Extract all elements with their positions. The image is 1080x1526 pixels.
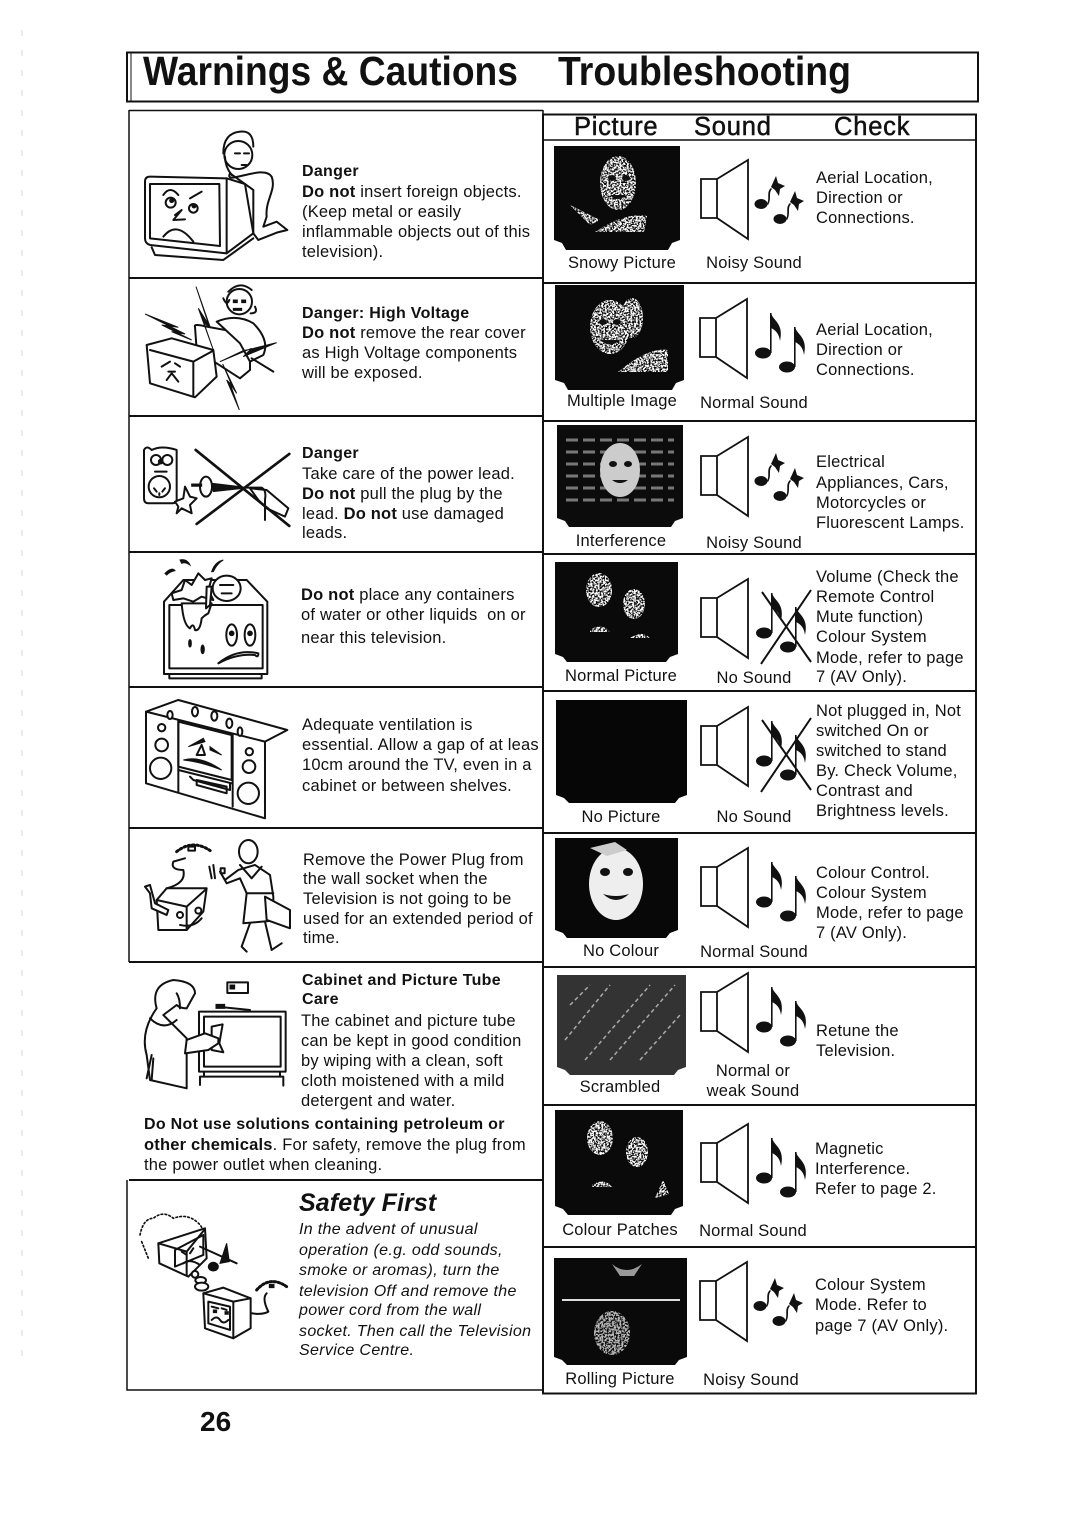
text: foreign objects danger: television). [302,243,383,261]
text: ventilation: Adequate ventilation is [302,716,473,734]
icon: high voltage shock [145,285,277,410]
text: cabinet and picture tube care [144,972,526,1174]
text: foreign objects danger: Danger [302,163,359,180]
row: rolling picture: page 7 (AV Only). [815,1317,948,1335]
row: snowy picture: Connections. [816,209,915,227]
text: power lead danger: leads. [302,524,347,542]
text: high voltage danger: Do not remove the rear cover [302,324,526,342]
row: snowy picture: Aerial Location, [816,169,933,187]
row: multiple image: Normal Sound [700,394,808,412]
text: high voltage danger: Danger: High Voltage [302,305,470,322]
icon: water spilled on TV [164,560,267,678]
row: interference [557,425,964,552]
row: no colour: Normal Sound [700,943,808,961]
row: normal picture: Mode, refer to page [816,649,964,667]
text: cabinet and picture tube care: Do Not use solutions containing petroleum or [144,1116,505,1133]
row: interference: Noisy Sound [706,534,802,552]
text: power lead danger: Danger [302,445,359,462]
row: scrambled: weak Sound [706,1082,799,1100]
text: remove power plug [303,851,533,947]
row: snowy picture [554,146,933,272]
row: multiple image: Aerial Location, [816,321,933,339]
text: ventilation: essential. Allow a gap of at leas [302,736,539,754]
row: normal picture: 7 (AV Only). [816,668,907,686]
row: normal picture: Normal Picture [565,667,677,685]
row: interference: Fluorescent Lamps. [816,514,964,532]
row: no picture: By. Check Volume, [816,762,958,780]
text: liquids warning: Do not place any containers [301,586,515,604]
text: cabinet and picture tube care: the power outlet when cleaning. [144,1156,382,1174]
row: rolling picture [554,1258,948,1389]
row: normal picture [555,562,964,687]
text: safety first advice [298,1221,531,1359]
text: ventilation [302,716,539,795]
row: no picture [556,700,961,826]
text: liquids warning: of water or other liquids on or [301,606,526,624]
row: no picture: No Picture [581,808,661,826]
icon: woman wiping TV [145,980,286,1088]
picture: interference [557,425,683,527]
picture: no colour [555,838,678,938]
row: snowy picture: Noisy Sound [706,254,802,272]
row: snowy picture: Snowy Picture [568,254,676,272]
text: foreign objects danger: (Keep metal or easily [302,203,462,221]
row: scrambled: Normal or [716,1062,790,1080]
row: no picture: Contrast and [816,782,913,800]
row: no colour [555,838,964,961]
row: no colour: Mode, refer to page [816,904,964,922]
row: no colour: 7 (AV Only). [816,924,907,942]
row: no colour: Colour Control. [816,864,930,882]
row: normal picture: Mute function) [816,608,923,626]
page scan margin marks [21,30,23,1370]
row: normal picture: No Sound [716,669,792,687]
text: cabinet and picture tube care: cloth moistened with a mild [301,1072,504,1090]
text: power lead danger: Do not pull the plug by the [302,485,503,503]
text: remove power plug: Television is not going to be [303,890,512,908]
text: cabinet and picture tube care: Care [302,991,339,1008]
icon: walking woman and TV unplugged [145,840,290,952]
panel: warnings and cautions [127,110,543,1390]
text: ventilation: cabinet or between shelves. [302,777,512,795]
row: colour patches: Refer to page 2. [815,1180,937,1198]
text: power lead danger: Take care of the power lead. [302,465,515,483]
icon: power plug crossed out [144,447,289,526]
text: safety first advice: operation (e.g. odd sounds, [299,1242,503,1259]
title banner: Troubleshooting [558,48,851,94]
table column headings: Picture [574,113,658,141]
text: foreign objects danger: Do not insert foreign objects. [302,183,522,201]
row: rolling picture: Colour System [815,1276,926,1294]
row: no picture: No Sound [716,808,792,826]
text: remove power plug: time. [303,929,340,947]
icon: angry TV with child [145,132,287,260]
row: scrambled: Television. [816,1042,895,1060]
text: liquids warning [301,586,526,647]
text: safety first advice: In the advent of unusual [299,1221,478,1238]
table column headings: Sound [694,113,772,141]
text: cabinet and picture tube care: other chemicals. For safety, remove the plug from [144,1136,526,1154]
row: no colour: No Colour [583,942,659,960]
row: rolling picture: Rolling Picture [565,1370,675,1388]
picture: scrambled [557,975,686,1075]
picture: no picture [556,700,687,803]
text: safety first advice: smoke or aromas), turn the [299,1262,500,1279]
row: colour patches: Colour Patches [562,1221,678,1239]
picture: rolling [554,1258,687,1365]
table column headings: Check [834,113,910,141]
row: no picture: switched to stand [816,742,947,760]
row: colour patches: Interference. [815,1160,910,1178]
row: interference: Appliances, Cars, [816,474,949,492]
row: interference: Motorcycles or [816,494,926,512]
picture: normal, no sound [555,562,678,662]
picture: multiple image [555,285,684,390]
page number: 26 [200,1406,231,1437]
title banner: Warnings & Cautions [143,48,518,94]
row: rolling picture: Mode. Refer to [815,1296,927,1314]
text: high voltage danger: will be exposed. [301,364,423,382]
panel: troubleshooting table [543,113,976,1394]
row: rolling picture: Noisy Sound [703,1371,799,1389]
row: no colour: Colour System [816,884,927,902]
text: cabinet and picture tube care: Cabinet and Picture Tube [302,972,501,989]
text: power lead danger [302,445,515,542]
row: colour patches: Magnetic [815,1140,884,1158]
row: colour patches [555,1110,937,1240]
row: normal picture: Remote Control [816,588,934,606]
text: remove power plug: Remove the Power Plug from [303,851,524,869]
row: interference: Interference [576,532,666,550]
text: safety first advice: power cord from the wall [298,1302,481,1319]
picture: colour patches [555,1110,683,1215]
text: cabinet and picture tube care: by wiping with a clean, soft [301,1052,503,1070]
text: power lead danger: lead. Do not use damaged [302,505,504,523]
row: colour patches: Normal Sound [699,1222,807,1240]
text: foreign objects danger [302,163,530,261]
row: scrambled: Retune the [816,1022,899,1040]
text: safety first advice: Service Centre. [299,1342,414,1359]
title banner [127,48,978,102]
text: liquids warning: near this television. [301,629,446,647]
row: no picture: Not plugged in, Not [816,702,961,720]
row: multiple image: Multiple Image [567,392,677,410]
row: no picture: Brightness levels. [816,802,949,820]
row: scrambled [557,973,899,1100]
text: remove power plug: the wall socket when the [303,870,488,888]
row: no picture: switched On or [816,722,929,740]
text: foreign objects danger: inflammable objects out of this [302,223,530,241]
row: multiple image: Direction or [816,341,903,359]
icon: TV with sounds and smoke [140,1214,287,1338]
picture: snowy [554,146,680,250]
text: ventilation: 10cm around the TV, even in a [302,756,532,774]
text: remove power plug: used for an extended period of [303,910,533,928]
text: high voltage danger: as High Voltage components [302,344,517,362]
row: snowy picture: Direction or [816,189,903,207]
row: normal picture: Volume (Check the [816,568,959,586]
text: cabinet and picture tube care: can be kept in good condition [301,1032,521,1050]
text: safety first advice: socket. Then call the Television [299,1323,531,1340]
row: normal picture: Colour System [816,628,927,646]
text: high voltage danger [301,305,526,382]
row: scrambled: Scrambled [580,1078,660,1096]
row: multiple image: Connections. [816,361,915,379]
icon: TV in cabinet ventilation [146,700,287,818]
text: cabinet and picture tube care: The cabinet and picture tube [301,1012,516,1030]
text: cabinet and picture tube care: detergent and water. [301,1092,455,1110]
row: multiple image [555,285,933,412]
heading: safety first: Safety First [299,1189,438,1217]
text: safety first advice: television Off and remove the [299,1283,517,1300]
table column headings [574,113,910,141]
row: interference: Electrical [816,453,885,471]
